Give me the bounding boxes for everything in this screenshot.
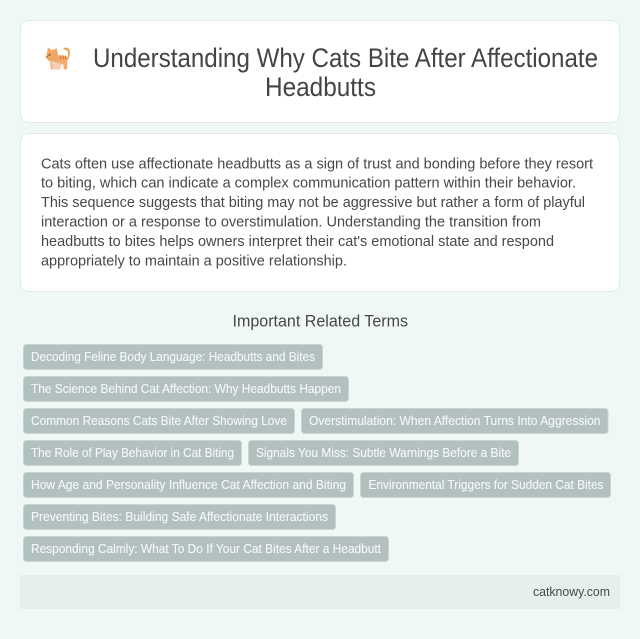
text block: description: to biting, which can indicate a complex communication pattern within their behavior.	[41, 175, 576, 192]
tag	[24, 344, 322, 370]
tag: Overstimulation: When Affection Turns Into Aggression	[309, 414, 600, 428]
title	[93, 43, 598, 102]
tag: The Role of Play Behavior in Cat Biting	[31, 446, 234, 460]
tag: Preventing Bites: Building Safe Affectionate Interactions	[31, 510, 328, 524]
text block: description: headbutts to bites helps owners interpret their cat's emotional state and respond	[41, 233, 554, 250]
tag	[24, 472, 354, 498]
tag	[24, 440, 242, 466]
tag: Environmental Triggers for Sudden Cat Bites	[368, 478, 604, 492]
tag: How Age and Personality Influence Cat Affection and Biting	[31, 478, 346, 492]
tag: Responding Calmly: What To Do If Your Cat Bites After a Headbutt	[31, 542, 381, 556]
tag: Signals You Miss: Subtle Warnings Before a Bite	[256, 446, 511, 460]
text block: description: This sequence suggests that biting may not be aggressive but rather a form of playful	[41, 194, 585, 211]
panel: title card	[20, 20, 620, 122]
tag: Decoding Feline Body Language: Headbutts and Bites	[31, 350, 315, 364]
footer source: catknowy.com	[533, 584, 610, 599]
heading: related terms: Important Related Terms	[232, 312, 408, 330]
footer	[20, 575, 620, 609]
tag list: related terms	[24, 344, 610, 562]
title: Understanding Why Cats Bite After Affectionate	[93, 43, 598, 73]
text block: description: appropriately to maintain a positive relationship.	[41, 253, 347, 270]
text block: description: Cats often use affectionate headbutts as a sign of trust and bonding before they resort	[41, 155, 594, 172]
text block: description: interaction or a response to overstimulation. Understanding the transition from	[41, 214, 541, 231]
tag	[24, 376, 348, 402]
text block: description	[41, 155, 594, 270]
tag: The Science Behind Cat Affection: Why Headbutts Happen	[31, 382, 341, 396]
tag	[360, 472, 610, 498]
tag: Common Reasons Cats Bite After Showing Love	[31, 414, 287, 428]
tag	[302, 408, 608, 434]
panel: description	[20, 134, 620, 292]
tag	[24, 408, 294, 434]
tag	[24, 504, 336, 530]
icon: cat	[46, 48, 70, 70]
title: Headbutts	[265, 72, 376, 102]
tag	[24, 536, 388, 562]
tag	[248, 440, 518, 466]
